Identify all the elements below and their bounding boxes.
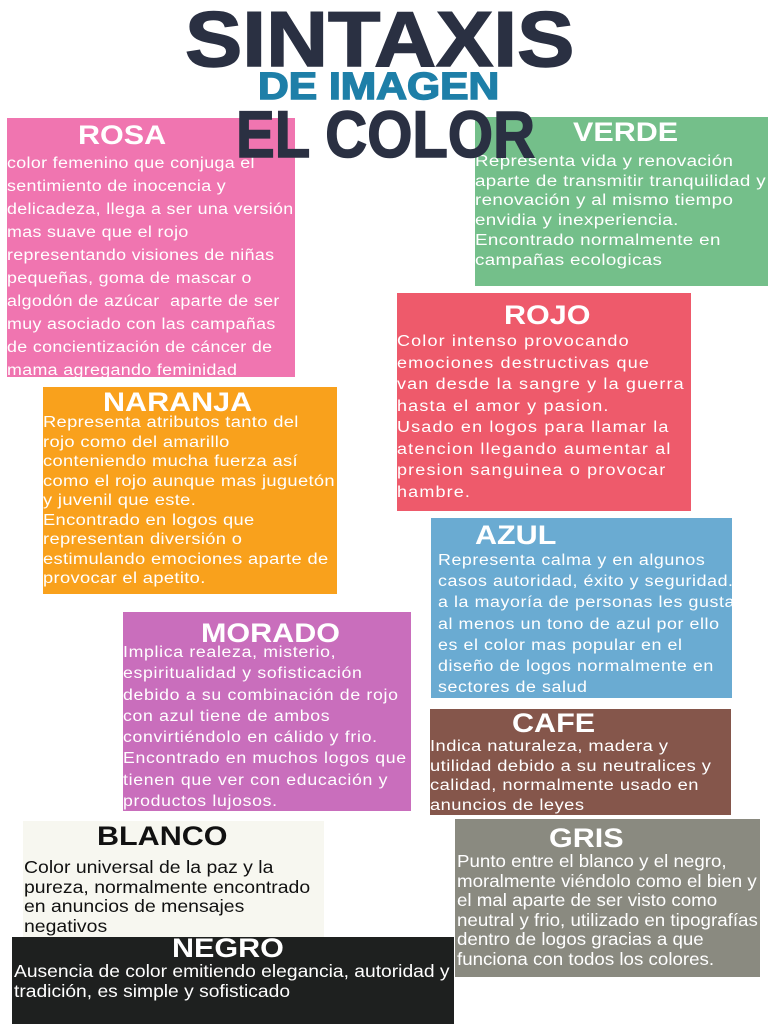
text: morado: espiritualidad y sofisticación — [123, 665, 363, 682]
text: rosa: pequeñas, goma de mascar o — [7, 270, 252, 287]
text: negro: tradición, es simple y sofisticado — [14, 981, 290, 1001]
text: azul: diseño de logos normalmente en — [438, 658, 714, 675]
heading: blanco: BLANCO — [97, 821, 228, 851]
text: rosa: representando visiones de niñas — [7, 247, 274, 264]
text: azul: es el color mas popular en el — [438, 637, 683, 654]
text: verde: Representa vida y renovación — [475, 153, 733, 170]
text: morado: debido a su combinación de rojo — [123, 687, 399, 704]
text: rosa: de concientización de cáncer de — [7, 339, 272, 356]
text: naranja: y juvenil que este. — [43, 492, 196, 509]
text: rojo: van desde la sangre y la guerra — [397, 376, 685, 393]
heading: azul: AZUL — [475, 520, 556, 550]
text: naranja: estimulando emociones aparte de — [43, 550, 329, 568]
text: morado: productos lujosos. — [123, 793, 278, 810]
text: cafe: utilidad debido a su neutralices y — [430, 758, 711, 774]
text: rosa — [7, 155, 294, 379]
box: verde — [475, 117, 768, 286]
text: naranja: provocar el apetito. — [43, 570, 206, 587]
text: rojo: Color intenso provocando — [397, 333, 630, 350]
text: naranja — [43, 414, 335, 587]
text: rojo: hambre. — [397, 484, 471, 500]
heading: verde: VERDE — [573, 117, 678, 147]
text: verde: aparte de transmitir tranquilidad y — [475, 173, 766, 190]
text: blanco: en anuncios de mensajes — [24, 896, 244, 916]
box: rosa — [7, 118, 295, 377]
text: naranja: Representa atributos tanto del — [43, 414, 299, 431]
text: morado: Implica realeza, misterio, — [123, 644, 336, 661]
text: verde — [475, 153, 766, 269]
box: gris — [455, 819, 760, 977]
text: naranja: representan diversión o — [43, 531, 242, 548]
text: cafe: Indica naturaleza, madera y — [430, 738, 668, 755]
box: morado — [123, 612, 411, 811]
text: azul: sectores de salud — [438, 679, 588, 696]
text: rojo: presion sanguinea o provocar — [397, 462, 666, 479]
text: rojo: atencion llegando aumentar al — [397, 440, 672, 458]
text: naranja: como el rojo aunque mas juguetón — [43, 472, 335, 490]
title: de imagen: DE IMAGEN — [258, 66, 499, 108]
text: morado: tienen que ver con educación y — [123, 772, 388, 789]
text: blanco — [24, 857, 310, 936]
box: cafe — [430, 709, 731, 815]
box: naranja — [43, 387, 337, 594]
text: rosa: muy asociado con las campañas — [7, 316, 276, 333]
box: azul — [431, 518, 732, 698]
text: azul: Representa calma y en algunos — [438, 552, 705, 569]
text: rosa: mama agregando feminidad — [7, 362, 237, 379]
text: negro: Ausencia de color emitiendo elegancia, autoridad y — [14, 961, 450, 981]
text: morado — [123, 644, 407, 810]
text: rojo: emociones destructivas que — [397, 354, 650, 372]
text: rosa: mas suave que el rojo — [7, 224, 189, 241]
text: azul: a la mayoría de personas les gusta — [438, 594, 735, 611]
text: rosa: color femenino que conjuga el — [7, 155, 255, 172]
text: cafe — [430, 738, 711, 814]
text: verde: envidia y inexperiencia. — [475, 212, 679, 229]
title: el color: EL COLOR — [236, 97, 535, 171]
heading: naranja: NARANJA — [103, 387, 252, 417]
text: rosa: sentimiento de inocencia y — [7, 178, 226, 195]
heading: gris: GRIS — [549, 823, 624, 853]
text: naranja: rojo como del amarillo — [43, 434, 230, 450]
text: verde: Encontrado normalmente en — [475, 232, 721, 249]
text: cafe: calidad, normalmente usado en — [430, 777, 699, 794]
text: azul — [438, 552, 735, 696]
box: blanco — [23, 821, 324, 937]
text: naranja: conteniendo mucha fuerza así — [43, 453, 298, 470]
text: cafe: anuncios de leyes — [430, 796, 584, 814]
text: azul: casos autoridad, éxito y seguridad. — [438, 573, 734, 590]
text: morado: convirtiéndolo en cálido y frio. — [123, 729, 378, 746]
text: blanco: negativos — [24, 916, 107, 936]
text: gris: dentro de logos gracias a que — [457, 929, 704, 949]
heading: cafe: CAFE — [512, 708, 595, 738]
text: verde: renovación y al mismo tiempo — [475, 192, 733, 209]
text: gris: el mal aparte de ser visto como — [457, 890, 717, 910]
text: rojo: Usado en logos para llamar la — [397, 419, 670, 436]
text: gris: neutral y frio, utilizado en tipografías — [457, 910, 758, 930]
text: verde: campañas ecologicas — [475, 252, 662, 269]
text: naranja: Encontrado en logos que — [43, 512, 255, 528]
box: negro — [12, 937, 454, 1024]
text: rojo — [397, 333, 685, 500]
text: gris: moralmente viéndolo como el bien y — [457, 870, 757, 890]
box: rojo — [397, 293, 691, 511]
text: rosa: algodón de azúcar aparte de ser — [7, 293, 280, 310]
title — [185, 0, 574, 171]
heading: rojo: ROJO — [504, 300, 590, 330]
heading: negro: NEGRO — [172, 933, 284, 963]
text: gris: funciona con todos los colores. — [457, 948, 714, 968]
text: gris: Punto entre el blanco y el negro, — [457, 851, 727, 871]
heading: morado: MORADO — [201, 618, 340, 648]
text: blanco: Color universal de la paz y la — [24, 857, 273, 877]
text: morado: Encontrado en muchos logos que — [123, 750, 407, 767]
heading: rosa: ROSA — [78, 120, 166, 150]
text: gris — [457, 851, 758, 968]
text: rojo: hasta el amor y pasion. — [397, 398, 610, 414]
text: rosa: delicadeza, llega a ser una versión — [7, 201, 294, 218]
text: blanco: pureza, normalmente encontrado — [24, 876, 310, 896]
text: morado: con azul tiene de ambos — [123, 708, 330, 725]
text: negro — [14, 961, 450, 1001]
text: azul: al menos un tono de azul por ello — [438, 616, 720, 633]
